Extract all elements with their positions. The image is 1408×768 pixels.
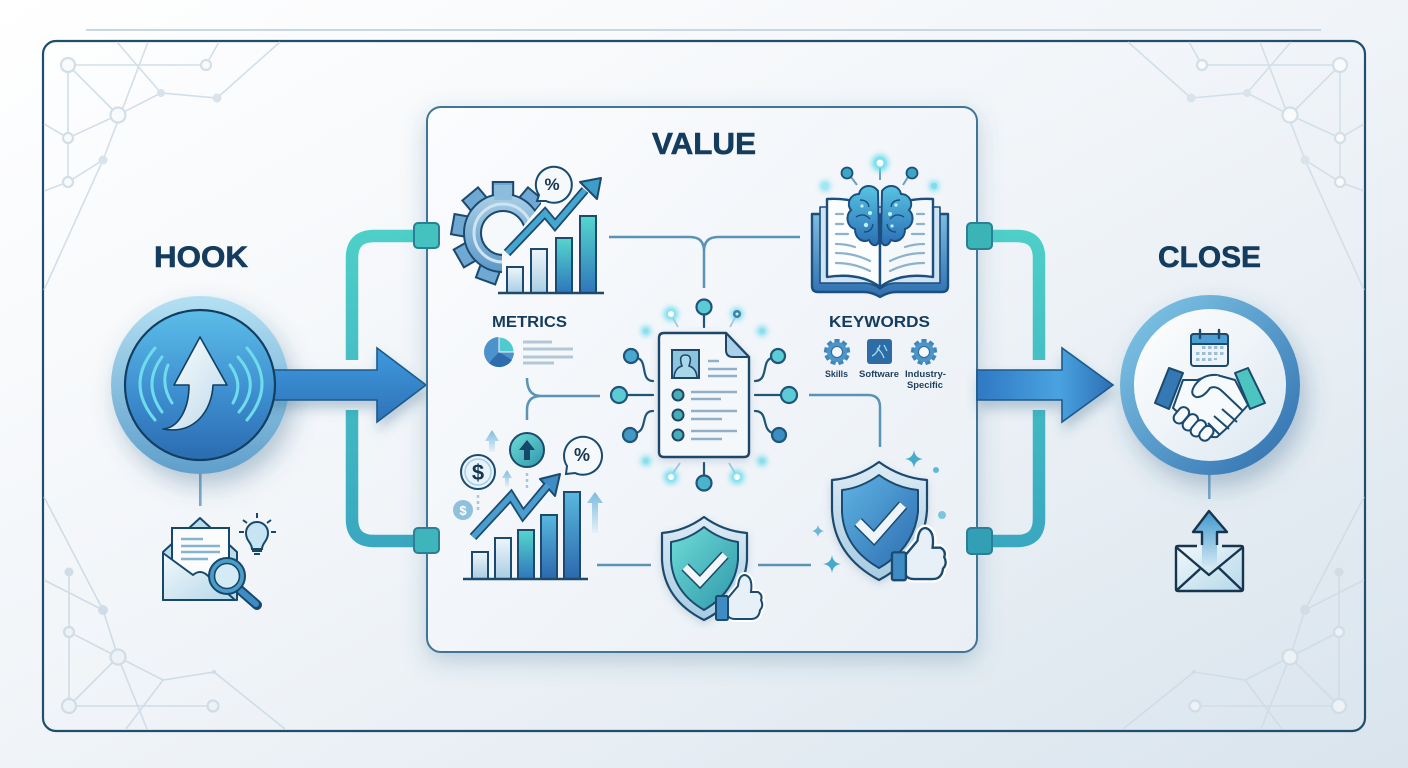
label: Industry-Specific: Specific [907,380,943,391]
icon: skills gear [824,339,850,365]
percent bubble [536,167,572,203]
network decoration: bottom right [1123,497,1364,729]
dollar coin faded [453,500,473,520]
glow dots [641,307,767,484]
icon: teal shield with thumb [662,517,762,620]
sparkles [812,450,946,573]
top rule [86,29,1321,31]
up-arrow coin [510,433,544,467]
connector stem: close to envelope [1208,470,1211,499]
icon: rising revenue chart [453,430,603,579]
brain [848,186,912,245]
percent bubble [564,437,602,475]
label: Skills: Skills [825,369,848,380]
heading: VALUE: VALUE [652,126,756,161]
icon: open envelope with magnifier and bulb [163,513,276,605]
icon: open book with brain [812,155,948,297]
connector nodes: right [967,223,992,554]
teal connector: left [352,236,420,541]
connectors inside value panel [527,237,880,565]
icon: gear with rising chart: % [544,175,560,194]
bars [463,492,588,579]
book [812,199,948,297]
dollar coin: $ [472,460,484,485]
value panel [427,107,977,652]
arrow: hook to value [262,348,426,422]
heading: CLOSE: CLOSE [1158,241,1261,274]
bars [498,216,604,293]
satellite nodes [611,300,797,490]
connector stem: hook to envelope [199,470,202,506]
hook badge [125,310,275,460]
icon: outgoing envelope [1176,511,1243,591]
icon: blue shield with thumb [812,450,946,580]
satellite links [627,314,781,476]
fading arrows [485,430,603,533]
network decoration: bottom left [44,497,285,729]
heading: HOOK: HOOK [154,241,248,274]
label: KEYWORDS: KEYWORDS [829,314,930,331]
dollar coin [461,455,495,489]
text lines [691,361,737,439]
icon: resume hub [611,300,797,490]
bullets [672,390,684,440]
teal connector: right [985,236,1039,541]
photo [672,350,699,378]
hook badge halo [111,296,289,474]
icon: gear with rising chart [451,167,604,293]
document [659,333,749,457]
icon: lightbulb [239,513,276,554]
connector nodes: left [414,223,439,553]
icon: pie chart with legend [484,337,573,367]
network decoration: top left [44,42,280,290]
icon: calendar [1191,330,1228,366]
close badge [1120,295,1300,475]
trend arrow [507,190,585,253]
label: Industry-Specific: Industry- [905,369,946,380]
icon: curved up arrow [163,337,227,430]
percent bubble: % [574,445,590,465]
icon: industry gear [911,339,937,365]
dollar coin faded: $ [459,503,467,518]
label: Industry-Specific [905,369,946,391]
icon: handshake [1155,368,1265,443]
label: METRICS: METRICS [492,314,567,331]
arrow: value to close [977,348,1113,422]
sound wave arcs [140,348,262,420]
icon: software tile [867,339,892,364]
network decoration: top right [1128,42,1364,290]
gear [451,182,555,284]
label: Software: Software [859,369,899,380]
brain antennae [820,155,939,191]
trend arrow [473,485,548,537]
